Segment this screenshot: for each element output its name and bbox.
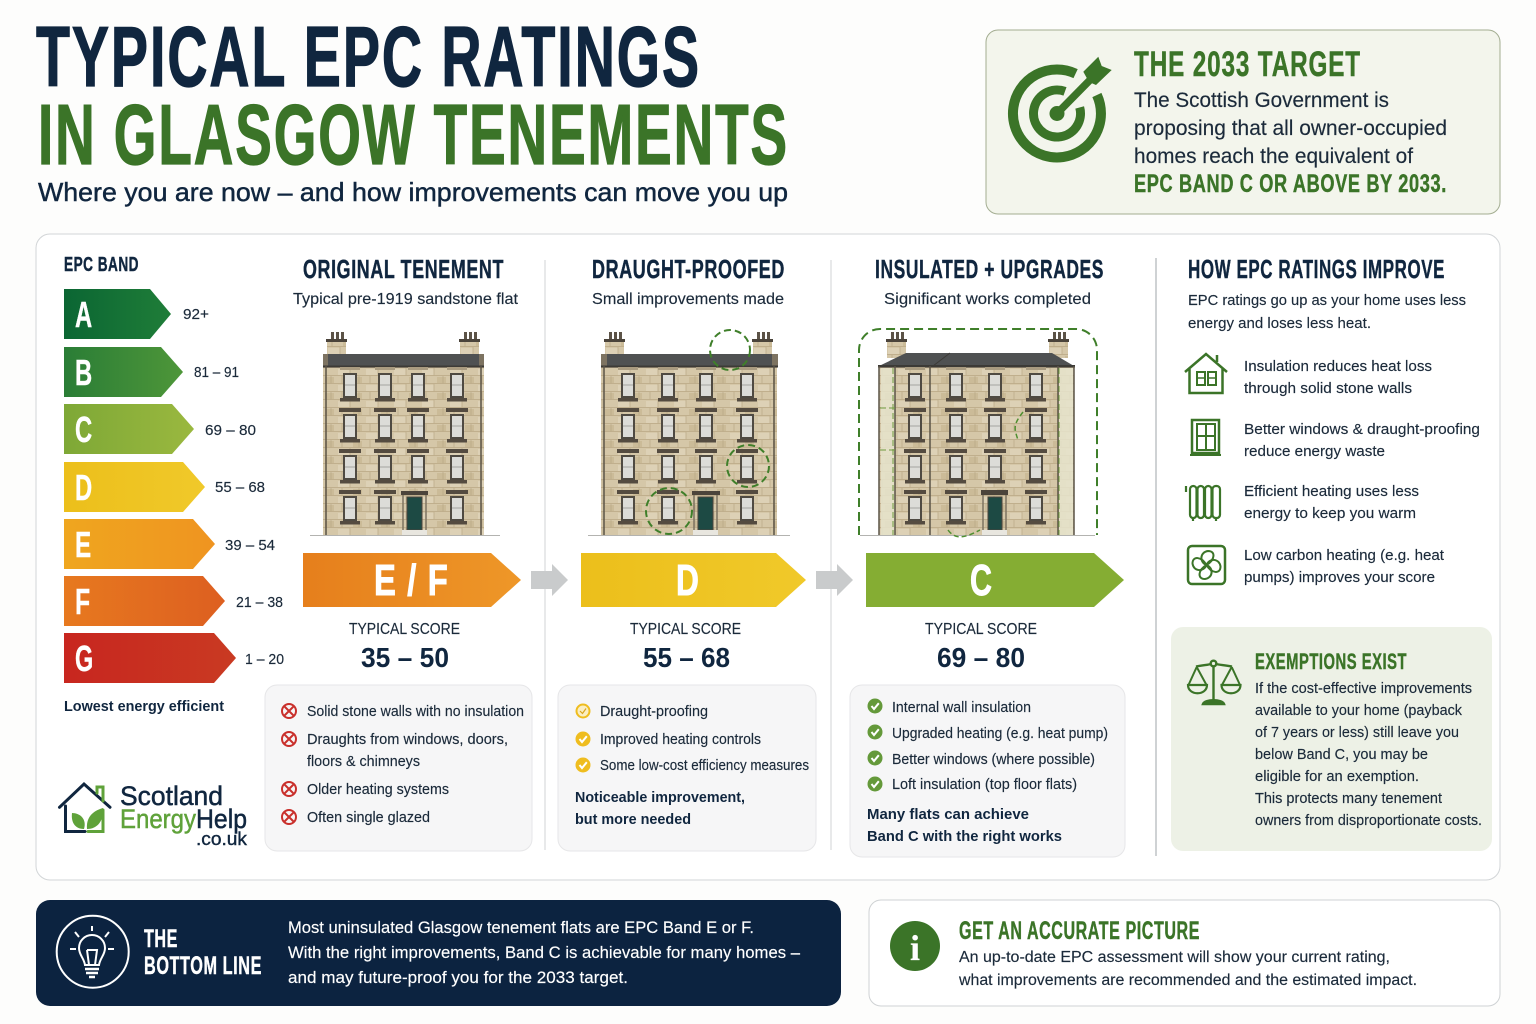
intro text: EPC ratings go up as your home uses less (1188, 292, 1466, 309)
band D (64, 462, 265, 512)
exemptions text: This protects many tenement (1255, 790, 1443, 807)
banner: D: D (676, 556, 700, 605)
illustration: tenement building (310, 332, 500, 536)
band A: A (75, 294, 93, 335)
icon: radiator (1186, 486, 1220, 521)
target heading: THE 2033 TARGET (1134, 45, 1361, 84)
card: problems list: Older heating systems (307, 781, 449, 798)
band A: 92+ (183, 306, 209, 323)
card: problems list: Solid stone walls with no insulation (307, 703, 524, 720)
icon: logo house (60, 784, 110, 832)
band D: 55 – 68 (215, 479, 265, 496)
heading: DRAUGHT-PROOFED (592, 254, 785, 284)
target text (1134, 89, 1447, 198)
typical score: 69 – 80 (937, 642, 1025, 673)
heading: EPC band: EPC BAND (64, 254, 139, 276)
subheading: Significant works completed (884, 291, 1091, 308)
typical score: TYPICAL SCORE (925, 621, 1037, 638)
card: upgrades list (850, 685, 1125, 857)
column: insulated + upgrades (850, 254, 1125, 857)
band E (64, 519, 275, 569)
panel: EPC band scale (64, 254, 284, 715)
title: IN GLASGOW TENEMENTS (38, 88, 789, 183)
target text: The Scottish Government is (1134, 89, 1389, 112)
typical score: 35 – 50 (361, 642, 449, 673)
accurate picture heading: GET AN ACCURATE PICTURE (959, 917, 1200, 945)
logo: Scotland Energy Help: Help (196, 804, 247, 834)
card: upgrades list: Internal wall insulation (892, 699, 1031, 716)
band F (64, 576, 283, 626)
subheading: Typical pre-1919 sandstone flat (293, 291, 519, 308)
logo: Scotland Energy Help: .co.uk (196, 829, 248, 849)
typical score (630, 621, 741, 673)
card: problems list: Draughts from windows, doors, (307, 731, 508, 748)
column: original tenement (265, 254, 532, 851)
accurate picture text (958, 949, 1417, 989)
text: low carbon: pumps) improves your score (1244, 569, 1435, 586)
text: low carbon: Low carbon heating (e.g. heat (1244, 547, 1445, 564)
exemptions text: If the cost-effective improvements (1255, 680, 1472, 697)
typical score: TYPICAL SCORE (630, 621, 741, 638)
bottom line heading (144, 925, 262, 980)
card: upgrades list: Better windows (where possible) (892, 751, 1095, 768)
typical score (925, 621, 1037, 673)
band E: E (75, 524, 92, 565)
text: insulation: through solid stone walls (1244, 380, 1412, 397)
band F: 21 – 38 (236, 594, 283, 611)
band D: D (75, 467, 93, 508)
bottom line text: and may future-proof you for the 2033 target. (288, 968, 628, 987)
band C: C (75, 409, 93, 450)
target text: homes reach the equivalent of (1134, 145, 1413, 168)
card: improvements list: Improved heating controls (600, 731, 761, 748)
band B: B (75, 352, 93, 393)
caption: Lowest energy efficient (64, 699, 224, 715)
exemptions text: below Band C, you may be (1255, 746, 1428, 763)
column: how EPC ratings improve (1185, 254, 1480, 586)
card: upgrades list: Upgraded heating (e.g. heat pump) (892, 725, 1108, 742)
card: problems list (265, 685, 532, 851)
icon: heat pump fan (1188, 546, 1225, 584)
subheading: Small improvements made (592, 291, 784, 308)
icon: scales (1188, 661, 1240, 704)
text: heating: Efficient heating uses less (1244, 483, 1419, 500)
exemptions text: owners from disproportionate costs. (1255, 812, 1482, 829)
column: draught-proofed (558, 254, 816, 851)
band B: 81 – 91 (194, 364, 239, 381)
bottom line text: With the right improvements, Band C is achievable for many homes – (288, 943, 801, 962)
intro text (1188, 292, 1466, 332)
heading: ORIGINAL TENEMENT (303, 254, 504, 284)
panel: the 2033 target (986, 30, 1500, 214)
logo: Scotland Energy Help (60, 781, 248, 849)
heading: INSULATED + UPGRADES (875, 254, 1104, 284)
text: insulation (1244, 358, 1432, 397)
icon: information (890, 921, 940, 971)
exemptions text (1255, 680, 1482, 829)
banner: E/F: E / F (374, 556, 449, 605)
exemptions text: available to your home (payback (1255, 702, 1462, 719)
title (36, 10, 789, 183)
illustration: building with insulation highlighted (859, 329, 1097, 537)
card: problems list: floors & chimneys (307, 753, 420, 770)
banner: C: C (970, 556, 993, 605)
icon: light bulb (57, 916, 129, 988)
banner: D (581, 553, 806, 607)
title: TYPICAL EPC RATINGS (36, 10, 701, 105)
icon: window (1190, 420, 1221, 455)
card: improvements list: Some low-cost efficiency measures (600, 757, 809, 774)
exemptions text: of 7 years or less) still leave you (1255, 724, 1459, 741)
bottom line heading: THE (144, 925, 178, 953)
banner: E/F (303, 553, 521, 607)
typical score (349, 621, 460, 673)
accurate picture text: what improvements are recommended and the estimated impact. (958, 972, 1417, 989)
banner: C (866, 553, 1124, 607)
text: windows: reduce energy waste (1244, 443, 1385, 460)
card: improvements list (558, 685, 816, 851)
accurate picture text: An up-to-date EPC assessment will show your current rating, (959, 949, 1390, 966)
text: windows (1244, 421, 1480, 460)
band G (64, 633, 284, 683)
icon: target with arrow (1013, 57, 1112, 157)
band C: 69 – 80 (205, 422, 256, 439)
intro text: energy and loses less heat. (1188, 315, 1371, 332)
band G: G (75, 638, 94, 679)
bottom line heading: BOTTOM LINE (144, 952, 262, 980)
illustration: building with highlighted draught-proofing (588, 330, 790, 536)
text: heating (1244, 483, 1419, 522)
text: windows: Better windows & draught-proofing (1244, 421, 1480, 438)
card: improvements list: Draught-proofing (600, 703, 708, 720)
text: heating: energy to keep you warm (1244, 505, 1416, 522)
target text: proposing that all owner-occupied (1134, 117, 1447, 140)
logo: Scotland Energy Help: Energy (120, 804, 196, 834)
arrow: E/F to D (531, 564, 568, 596)
band E: 39 – 54 (225, 537, 275, 554)
band C (64, 404, 256, 454)
bottom line text: Most uninsulated Glasgow tenement flats are EPC Band E or F. (288, 918, 754, 937)
card: upgrades list: Band C with the right works (867, 828, 1062, 845)
card: problems list: Often single glazed (307, 809, 430, 826)
card: upgrades list: Many flats can achieve (867, 806, 1029, 823)
text: low carbon (1244, 547, 1445, 586)
card: improvements list: Noticeable improvement, (575, 789, 745, 806)
band A (64, 289, 209, 339)
icon: house (1185, 354, 1227, 393)
band F: F (75, 581, 91, 622)
panel: get an accurate picture (869, 900, 1500, 1006)
exemptions text: eligible for an exemption. (1255, 768, 1419, 785)
card: upgrades list: Loft insulation (top floor flats) (892, 776, 1077, 793)
typical score: 55 – 68 (643, 642, 730, 673)
text: insulation: Insulation reduces heat loss (1244, 358, 1432, 375)
logo: Scotland Energy Help: Scotland (120, 781, 223, 811)
exemptions heading: EXEMPTIONS EXIST (1255, 649, 1407, 674)
band B (64, 347, 239, 397)
panel: exemptions exist (1171, 627, 1492, 851)
subtitle: Where you are now – and how improvements can move you up (38, 177, 788, 207)
panel: the bottom line (36, 900, 841, 1006)
typical score: TYPICAL SCORE (349, 621, 460, 638)
arrow: D to C (816, 564, 853, 596)
card: improvements list: but more needed (575, 811, 691, 828)
bottom line text (288, 918, 801, 987)
icon: information: i (910, 928, 920, 968)
band G: 1 – 20 (245, 651, 284, 668)
panel: main (36, 234, 1500, 880)
